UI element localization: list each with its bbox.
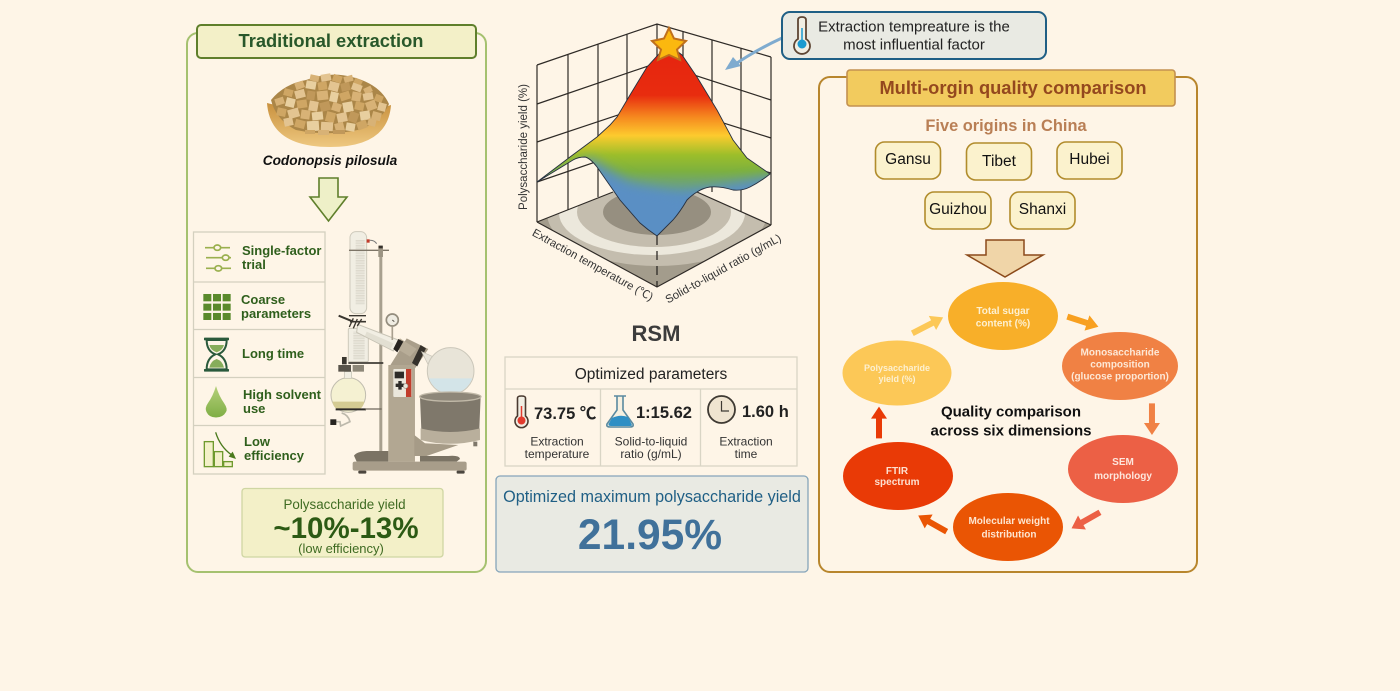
image: bowl of Codonopsis pilosula xyxy=(267,73,391,147)
label: ratio: ratio (g/mL) xyxy=(620,447,682,461)
node: SEM morphology: morphology xyxy=(1094,471,1152,482)
subheading: five origins: Five origins in China xyxy=(925,117,1087,135)
heading: RSM: RSM xyxy=(632,321,680,346)
node: monosaccharide composition: composition xyxy=(1090,360,1150,370)
center label: quality comparison: Quality comparison xyxy=(941,404,1081,420)
arrow: molecular to FTIR xyxy=(914,509,951,539)
arrow: sugar to mono xyxy=(1065,309,1101,334)
node: total sugar content xyxy=(948,282,1058,350)
callout: optimized maximum yield: 21.95% xyxy=(578,512,722,559)
response surface xyxy=(544,53,770,236)
icon: clock xyxy=(708,396,735,423)
icon: grid xyxy=(203,294,231,320)
node: monosaccharide composition: Monosaccharide xyxy=(1081,348,1160,358)
node: polysaccharide yield: Polysaccharide xyxy=(864,363,930,373)
row: single-factor trial: trial xyxy=(242,257,266,272)
table: optimized parameters xyxy=(505,357,797,466)
origin: Gansu xyxy=(876,142,940,179)
origin: Shanxi xyxy=(1010,192,1075,229)
arrow: mono to SEM xyxy=(1144,403,1160,435)
species name: Codonopsis pilosula xyxy=(263,153,398,168)
node: SEM morphology xyxy=(1068,435,1178,503)
node: monosaccharide composition: (glucose proportion) xyxy=(1071,372,1169,382)
arrow: polysaccharide to sugar xyxy=(909,310,947,340)
value: temperature: 73.75 ℃ xyxy=(534,405,597,423)
axis label: ratio: Solid-to-liquid ratio (g/mL) xyxy=(664,232,784,306)
origin: Guizhou xyxy=(925,192,991,229)
node: FTIR spectrum: FTIR xyxy=(886,466,909,477)
origin: Hubei xyxy=(1057,142,1122,179)
icon: thermometer red xyxy=(515,396,528,428)
icon: falling bars xyxy=(204,432,236,467)
callout text: Extraction tempreature is the xyxy=(818,18,1010,36)
value: time: 1.60 h xyxy=(742,403,789,421)
callout: polysaccharide yield low efficiency xyxy=(242,488,443,557)
node: total sugar content: Total sugar xyxy=(976,306,1030,317)
center label: quality comparison: across six dimensions xyxy=(931,422,1091,440)
node: monosaccharide composition xyxy=(1062,332,1178,400)
node: polysaccharide yield xyxy=(842,340,952,406)
heading bar: traditional extraction: Traditional extraction xyxy=(239,30,423,51)
callout text: most influential factor xyxy=(843,36,985,54)
icon: hourglass xyxy=(204,338,229,372)
node: FTIR spectrum xyxy=(843,442,953,510)
node: polysaccharide yield: yield (%) xyxy=(878,374,916,384)
arrow: down xyxy=(310,178,347,221)
label: temperature: Extraction xyxy=(530,434,584,448)
origin: Shanxi: Shanxi xyxy=(1019,201,1066,218)
chart: RSM 3D response surface xyxy=(518,24,784,306)
row: low efficiency: Low xyxy=(244,434,271,449)
arrow: FTIR to polysaccharide xyxy=(871,407,887,438)
panel: multi-origin quality comparison xyxy=(819,70,1197,572)
origin: Guizhou: Guizhou xyxy=(929,201,987,218)
origin: Hubei: Hubei xyxy=(1069,151,1110,168)
table: drawbacks of traditional extraction xyxy=(194,232,325,474)
origin: Tibet xyxy=(966,143,1032,180)
grid walls xyxy=(537,24,771,287)
heading bar: Multi-orgin quality comparison xyxy=(879,77,1147,98)
node: molecular weight distribution: Molecular weight xyxy=(968,516,1050,527)
origin: Gansu: Gansu xyxy=(885,151,931,168)
node: SEM morphology: SEM xyxy=(1112,457,1134,468)
arrow: origins to dimensions xyxy=(967,240,1043,277)
row: low efficiency: efficiency xyxy=(244,448,305,463)
axis label: yield: Polysaccharide yield (%) xyxy=(518,84,530,210)
icon: sliders xyxy=(205,245,231,271)
row: single-factor trial: Single-factor xyxy=(242,243,321,258)
cycle arrows xyxy=(871,309,1160,539)
icon: star at maximum xyxy=(652,28,686,60)
axis label: temperature: Extraction temperature (℃) xyxy=(530,227,655,304)
illustration: rotary evaporator xyxy=(330,232,481,474)
row: high solvent use: High solvent xyxy=(243,387,322,402)
callout: polysaccharide yield low efficiency: (low efficiency) xyxy=(298,541,384,556)
callout: polysaccharide yield low efficiency: ~10%-13% xyxy=(273,512,419,545)
label: temperature: temperature xyxy=(525,447,590,461)
arrow: SEM to molecular xyxy=(1068,505,1104,535)
row: long time: Long time xyxy=(242,346,304,361)
origin: Tibet: Tibet xyxy=(982,153,1017,170)
node: total sugar content: content (%) xyxy=(976,318,1030,330)
table title: Optimized parameters xyxy=(575,366,727,383)
label: ratio: Solid-to-liquid xyxy=(615,434,687,448)
callout: optimized maximum yield: Optimized maximum polysaccharide yield xyxy=(503,488,801,506)
callout: most influential factor xyxy=(782,12,1046,59)
node: molecular weight distribution xyxy=(953,493,1063,561)
callout: optimized maximum yield xyxy=(496,476,808,572)
value: ratio: 1:15.62 xyxy=(636,404,692,422)
label: time: Extraction xyxy=(719,434,773,448)
arrow: callout to surface xyxy=(725,38,782,70)
node: FTIR spectrum: spectrum xyxy=(874,477,920,488)
icon: thermometer xyxy=(794,17,810,54)
icon: flask xyxy=(607,396,633,427)
heading bar xyxy=(847,70,1175,106)
label: time: time xyxy=(735,447,758,461)
node: molecular weight distribution: distribution xyxy=(982,530,1036,540)
callout: polysaccharide yield low efficiency: Polysaccharide yield xyxy=(283,497,406,512)
icon: solvent drop xyxy=(206,386,227,418)
row: high solvent use: use xyxy=(243,401,265,416)
heading bar: traditional extraction xyxy=(197,25,476,58)
panel: traditional extraction xyxy=(187,25,486,572)
row: coarse parameters: parameters xyxy=(241,306,311,321)
row: coarse parameters: Coarse xyxy=(241,292,285,307)
floor with contours xyxy=(538,192,770,286)
